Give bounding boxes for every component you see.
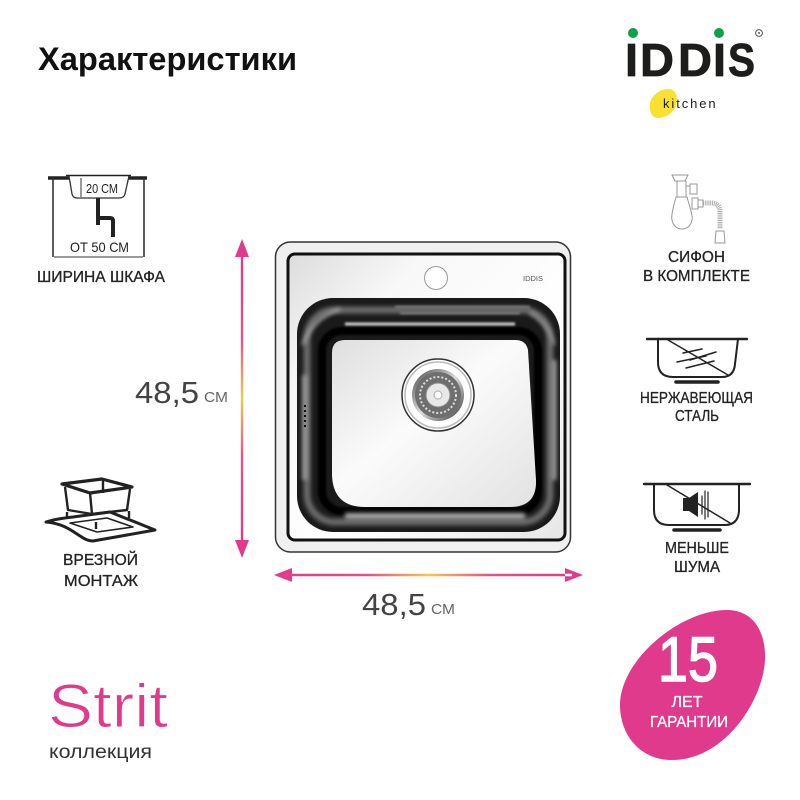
sink: drain: [402, 359, 474, 431]
label: siphon included: В КОМПЛЕКТЕ: [643, 268, 750, 285]
dimension: width value: СМ: [431, 601, 455, 618]
sink: basin floor: [332, 340, 536, 507]
logo: iddis kitchen: kitchen: [663, 96, 718, 111]
dimension: width value: 48,5: [362, 587, 426, 622]
dimension arrow: width: [274, 568, 583, 582]
icon: cabinet width: 20 СМ: [86, 182, 118, 196]
product: sink: [276, 242, 570, 552]
icon: cabinet width: [48, 176, 147, 257]
dimension: height value: 48,5: [135, 375, 199, 410]
label: less noise: ШУМА: [674, 559, 720, 576]
icon: cut-in mounting: [46, 479, 155, 541]
sink: basin walls: [297, 298, 560, 532]
badge: 15 year warranty: ЛЕТ: [672, 694, 703, 711]
label: stainless steel: НЕРЖАВЕЮЩАЯ: [640, 390, 753, 407]
label: stainless steel: [640, 390, 753, 425]
logo: iddis kitchen: S: [728, 34, 755, 86]
collection caption: коллекция: [49, 742, 152, 763]
icon: cabinet width: ОТ 50 СМ: [70, 239, 129, 255]
icon: less noise: [644, 484, 750, 530]
label: cut-in mounting: ВРЕЗНОЙ: [63, 550, 138, 569]
dimension: height value: СМ: [204, 389, 228, 406]
label: cabinet width: ШИРИНА ШКАФА: [37, 269, 165, 286]
logo: iddis kitchen: I: [625, 34, 638, 86]
dimension: width value: [362, 587, 455, 622]
logo: iddis kitchen: I: [713, 34, 726, 86]
icon: siphon: [672, 175, 725, 243]
label: cut-in mounting: [63, 550, 138, 590]
label: siphon included: [643, 249, 750, 285]
logo: iddis kitchen: D: [678, 34, 712, 86]
label: stainless steel: СТАЛЬ: [675, 408, 719, 425]
icon: stainless steel: [647, 339, 747, 382]
label: siphon included: СИФОН: [668, 249, 725, 266]
label: less noise: [665, 540, 729, 576]
title: Характеристики: [38, 41, 297, 77]
logo: iddis kitchen: [625, 28, 762, 118]
label: less noise: МЕНЬШЕ: [665, 540, 729, 557]
badge: 15 year warranty: [620, 610, 765, 760]
dimension: height value: [135, 375, 228, 410]
label: cut-in mounting: МОНТАЖ: [64, 573, 138, 590]
collection name: Strit: [48, 672, 168, 740]
dimension arrow: height: [235, 239, 249, 558]
sink: tap hole: [424, 266, 448, 290]
sink: brand mark: IDDIS: [523, 276, 543, 283]
badge: 15 year warranty: 15: [658, 625, 718, 695]
badge: 15 year warranty: ГАРАНТИИ: [650, 714, 728, 731]
logo: iddis kitchen: D: [640, 34, 674, 86]
